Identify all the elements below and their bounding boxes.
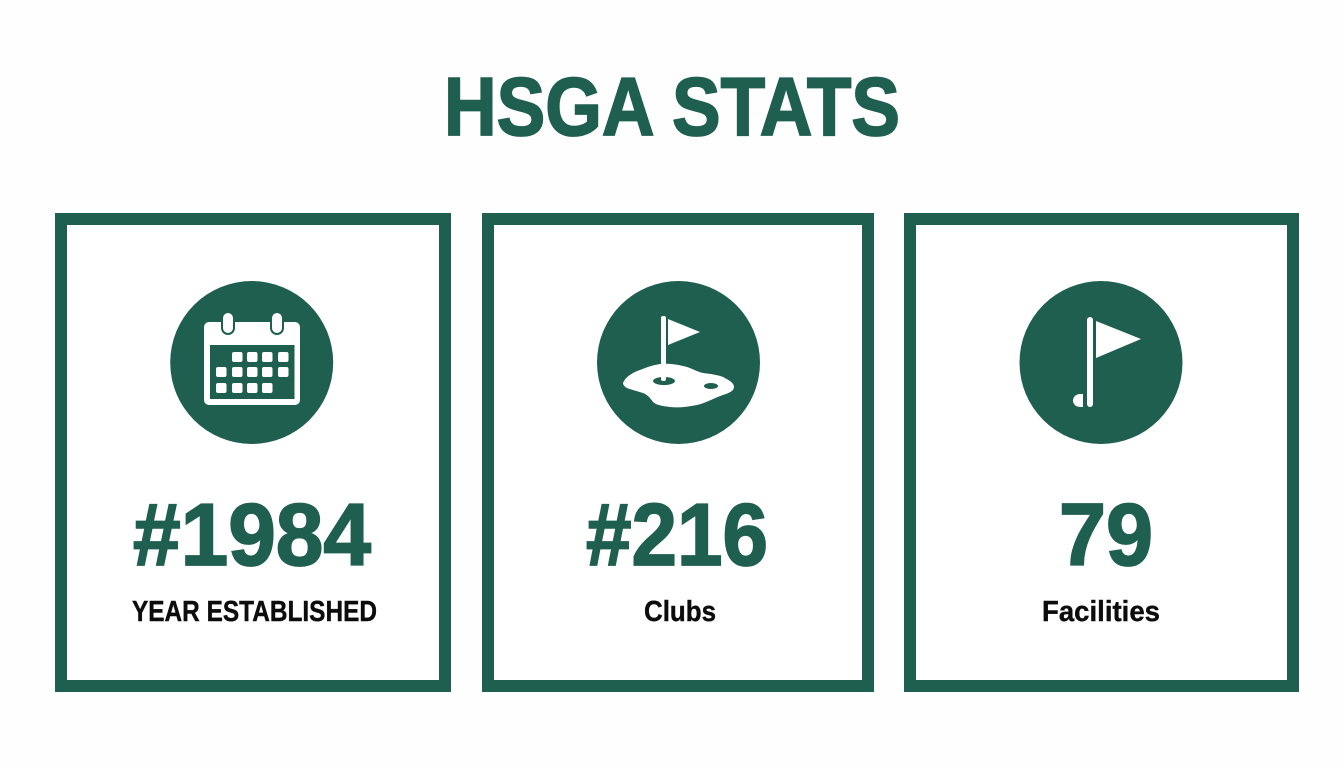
panel: clubs bbox=[488, 219, 868, 686]
stat number: 79: 79 bbox=[1059, 485, 1153, 584]
stat number: 1984: #1984 bbox=[133, 485, 371, 584]
title: HSGA STATS bbox=[444, 60, 900, 153]
icon: flag and ball bbox=[1020, 281, 1182, 444]
icon: calendar bbox=[170, 281, 333, 444]
stat number: 216: #216 bbox=[586, 485, 768, 584]
panel: facilities bbox=[910, 219, 1293, 686]
label: year established: YEAR ESTABLISHED bbox=[132, 596, 377, 628]
panel: year established bbox=[61, 219, 445, 686]
label: facilities: Facilities bbox=[1042, 596, 1160, 628]
icon: golf green with flag bbox=[597, 281, 760, 444]
label: clubs: Clubs bbox=[644, 596, 716, 628]
